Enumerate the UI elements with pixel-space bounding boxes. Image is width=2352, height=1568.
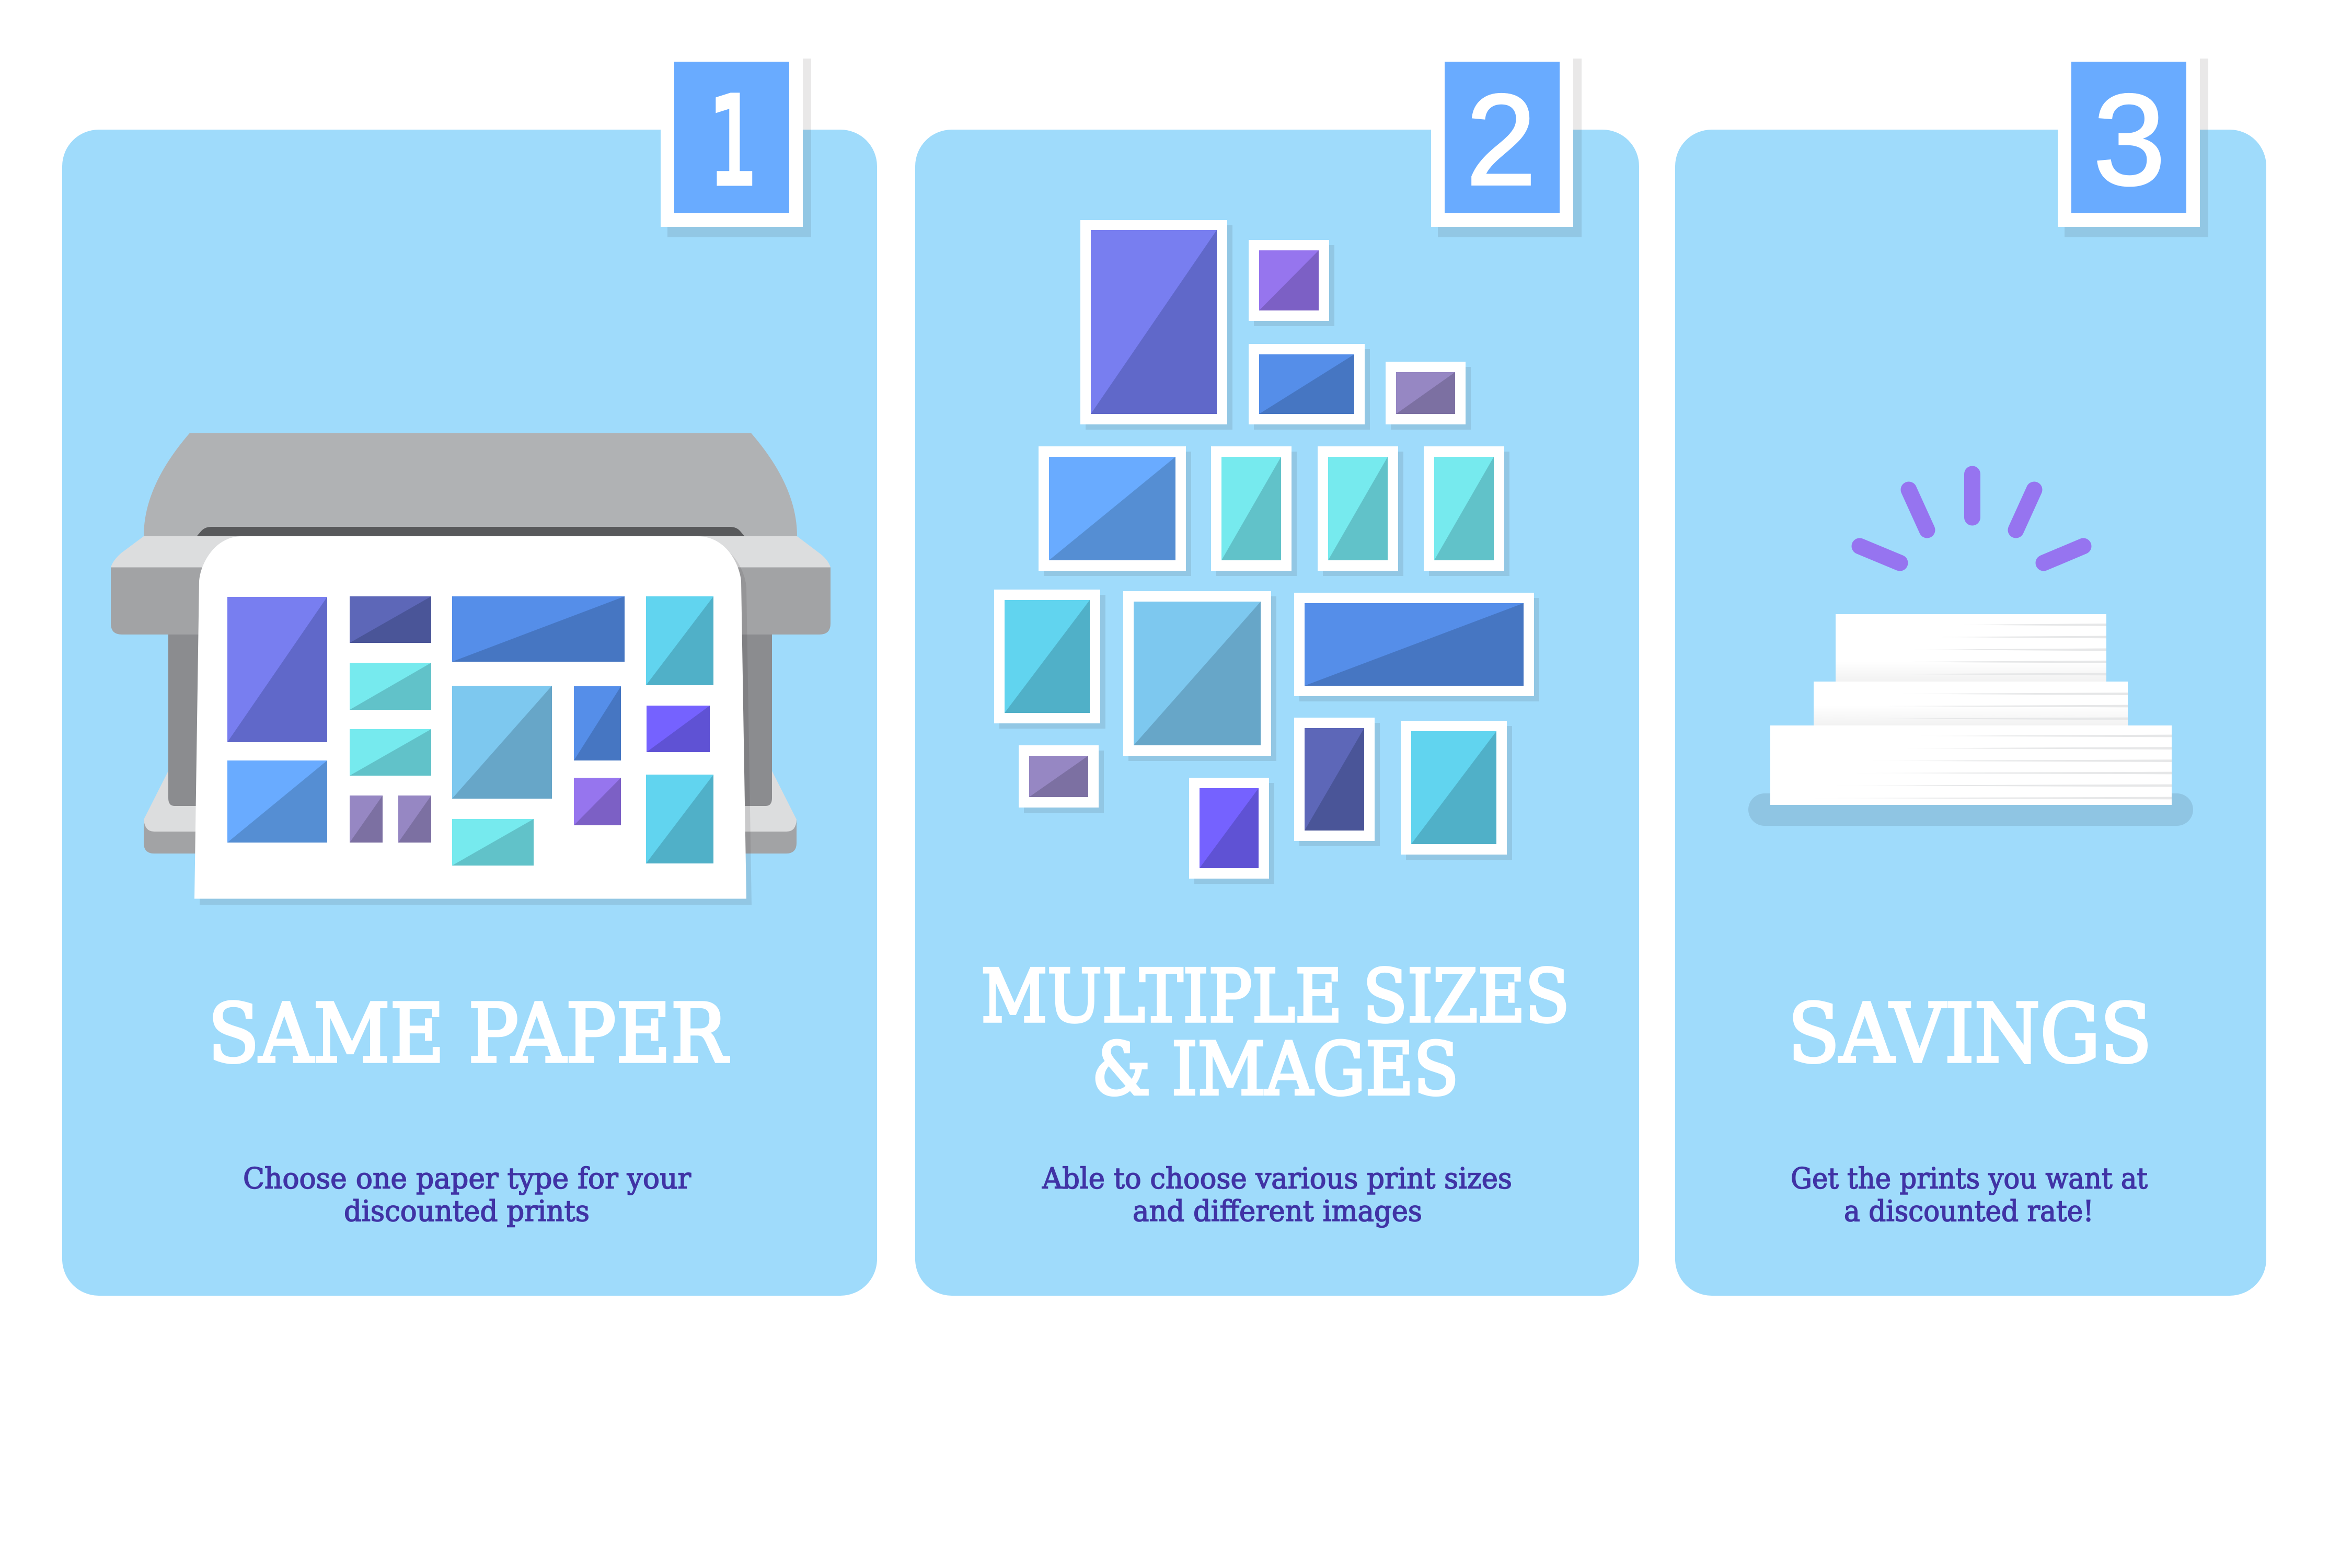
heading: savings: SAVINGS (1788, 986, 2152, 1081)
printer body (168, 634, 772, 806)
frame: cyan right (1401, 721, 1512, 860)
frame: teal 1 (1211, 446, 1297, 576)
description: same paper: discounted prints (344, 1194, 590, 1228)
top stack (1836, 614, 2106, 682)
printed sheet (194, 536, 746, 899)
frame: indigo bottom (1189, 778, 1274, 884)
description: multiple sizes: Able to choose various print sizes (1042, 1161, 1512, 1195)
middle stack (1814, 682, 2128, 725)
heading: multiple sizes and images (981, 954, 1570, 1111)
bottom stack (1770, 725, 2172, 805)
printer lid (144, 433, 797, 536)
description: savings (1791, 1161, 2148, 1228)
badge: step 1: 1 (709, 71, 758, 212)
icon: sparkle rays (1860, 474, 2083, 563)
panel: multiple sizes and images (915, 59, 1639, 1296)
frame: mauve lower left (1019, 745, 1104, 813)
illustration: stack of paper (1748, 614, 2193, 826)
badge: step 3 (2058, 59, 2208, 237)
printer paper slot (195, 527, 746, 538)
printer upper housing (111, 567, 831, 635)
frame: navy portrait (1294, 718, 1380, 846)
badge: step 2 (1431, 59, 1582, 237)
badge: step 1 (661, 59, 811, 237)
frame: teal 2 (1318, 446, 1403, 576)
description: multiple sizes (1042, 1161, 1512, 1228)
heading: multiple sizes and images: & IMAGES (1092, 1027, 1459, 1111)
panel: savings (1675, 59, 2266, 1296)
illustration: framed prints gallery (994, 220, 1539, 884)
badge: step 2: 2 (1466, 67, 1536, 212)
frame: pale blue large (1123, 591, 1276, 761)
heading: multiple sizes and images: MULTIPLE SIZES (981, 954, 1570, 1039)
frame: mauve small (1386, 362, 1471, 430)
frame: teal 3 (1424, 446, 1509, 576)
description: savings: a discounted rate! (1844, 1194, 2094, 1228)
printer top ledge (111, 536, 831, 568)
paper shadow (200, 542, 752, 905)
frame: large purple (1080, 220, 1232, 430)
frame: blue landscape (1249, 344, 1370, 430)
stack shadow (1748, 793, 2193, 826)
badge: step 3: 3 (2093, 67, 2165, 212)
frame: wide blue panorama (1294, 593, 1539, 701)
printer base (144, 771, 797, 854)
frame: cyan left (994, 590, 1105, 729)
illustration: large format printer (111, 433, 831, 905)
description: multiple sizes: and different images (1133, 1194, 1422, 1228)
panel: same paper (62, 59, 877, 1296)
description: savings: Get the prints you want at (1791, 1161, 2148, 1195)
frame: small violet (1249, 240, 1334, 326)
description: same paper: Choose one paper type for your (243, 1161, 691, 1195)
frame: sky landscape (1039, 446, 1191, 576)
heading: same paper: SAME PAPER (208, 986, 729, 1081)
printed images on sheet (227, 596, 713, 866)
description: same paper (243, 1161, 691, 1228)
